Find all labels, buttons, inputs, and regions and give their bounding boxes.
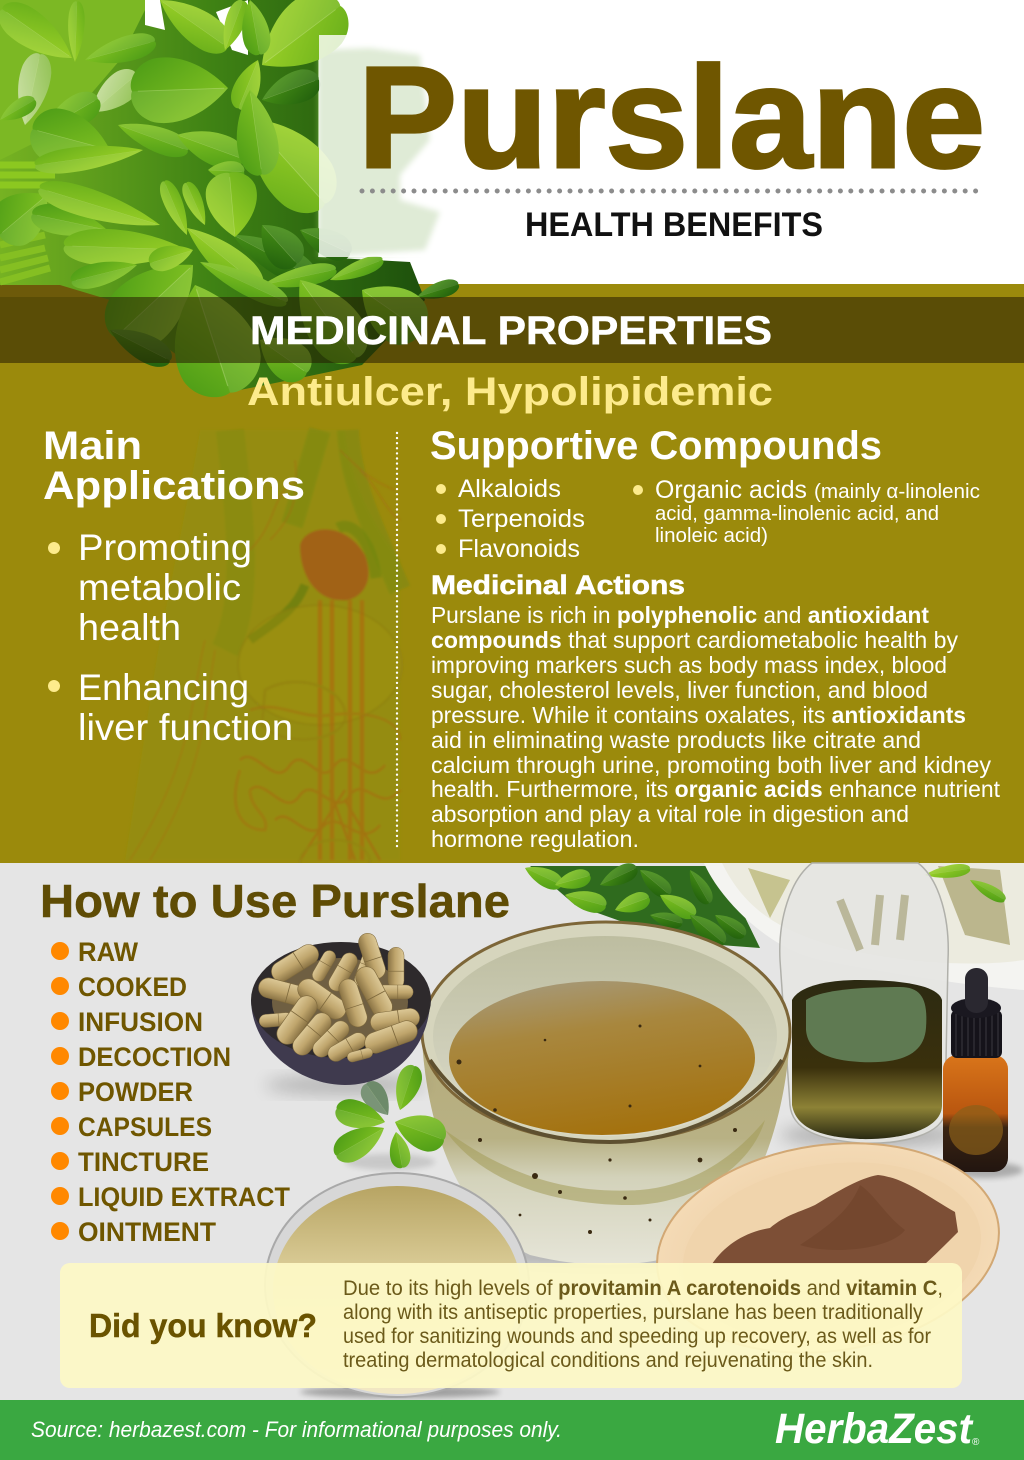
list: applications: Enhancing xyxy=(78,667,249,708)
list: forms of use: POWDER xyxy=(78,1077,193,1107)
photo: ceramic bowl of tea xyxy=(422,922,790,1269)
list: compounds: Terpenoids xyxy=(458,505,585,533)
list: compounds: Alkaloids xyxy=(458,475,561,503)
list: forms of use: DECOCTION xyxy=(78,1042,231,1072)
text: medicinal actions paragraph: sugar, cholesterol levels, liver function, and blood xyxy=(431,677,928,703)
subtitle: HEALTH BENEFITS xyxy=(525,206,823,244)
heading: main applications xyxy=(43,424,305,508)
list: applications: metabolic xyxy=(78,567,241,608)
title: Purslane xyxy=(358,37,985,198)
text: medicinal actions paragraph: pressure. While it contains oxalates, its antioxidants xyxy=(431,702,966,728)
callout text xyxy=(343,1277,943,1372)
list: forms of use xyxy=(51,937,290,1247)
top background leaves xyxy=(0,0,360,143)
list: compounds: acid, gamma-linolenic acid, and xyxy=(655,503,939,525)
list: compounds: linoleic acid) xyxy=(655,525,768,547)
subheading: antiulcer, hypolipidemic: Antiulcer, Hypolipidemic xyxy=(247,370,773,414)
dotted divider xyxy=(362,188,978,194)
text: medicinal actions paragraph: improving markers such as body mass index, blood xyxy=(431,652,947,678)
list: compounds: (mainly α-linolenic xyxy=(814,481,980,503)
list: forms of use: COOKED xyxy=(78,972,187,1002)
photo: dropper bottle xyxy=(943,968,1023,1178)
text: medicinal actions paragraph: hormone regulation. xyxy=(431,826,639,852)
panel: main applications xyxy=(43,424,305,748)
list: applications: liver function xyxy=(78,707,293,748)
heading: medicinal properties: MEDICINAL PROPERTIES xyxy=(250,309,772,353)
list: applications: Promoting xyxy=(78,527,252,568)
photo: glass bottle xyxy=(780,863,960,1147)
vertical dotted divider xyxy=(396,433,398,848)
photo: small green sprig xyxy=(329,1062,450,1170)
heading: main applications: Applications xyxy=(43,464,305,508)
photo: white plate xyxy=(704,862,1024,990)
list: forms of use: RAW xyxy=(78,937,138,967)
list: forms of use: OINTMENT xyxy=(78,1217,216,1247)
text: medicinal actions paragraph: compounds that support cardiometabolic health by xyxy=(431,627,958,653)
photo: purslane bunch xyxy=(0,0,461,407)
list: forms of use: CAPSULES xyxy=(78,1112,212,1142)
list: forms of use: INFUSION xyxy=(78,1007,203,1037)
callout text: along with its antiseptic properties, purslane has been traditionally xyxy=(343,1301,923,1324)
callout text: used for sanitizing wounds and speeding up recovery, as well as for xyxy=(343,1325,931,1348)
callout heading: Did you know? xyxy=(89,1307,317,1344)
list: compounds xyxy=(436,475,980,563)
panel: medicinal properties background xyxy=(0,284,1024,863)
list: forms of use: LIQUID EXTRACT xyxy=(78,1182,290,1212)
callout text: Due to its high levels of provitamin A carotenoids and vitamin C, xyxy=(343,1277,943,1300)
text: medicinal actions paragraph: calcium through urine, promoting both liver and kidney xyxy=(431,752,991,778)
logo: HerbaZest: HerbaZest xyxy=(775,1405,974,1453)
callout: did you know xyxy=(60,1263,962,1388)
heading: supportive compounds: Supportive Compounds xyxy=(430,424,882,468)
photo: herb sprigs xyxy=(521,860,760,951)
panel: supportive compounds xyxy=(430,424,1001,852)
band: medicinal properties xyxy=(0,297,1024,363)
text: medicinal actions paragraph: Purslane is rich in polyphenolic and antioxidant xyxy=(431,602,929,628)
faded leaves base xyxy=(318,48,440,257)
heading: how to use purslane: How to Use Purslane xyxy=(40,875,510,927)
panel: how to use background xyxy=(0,863,1024,1400)
callout text: treating dermatological conditions and rejuvenating the skin. xyxy=(343,1349,873,1372)
photo: capsules in dark bowl xyxy=(251,931,431,1095)
photo: wooden plate of powder xyxy=(643,1122,1013,1374)
photo: ointment tin xyxy=(265,1173,529,1398)
text: medicinal actions paragraph: absorption and play a vital role in digestion and xyxy=(431,801,909,827)
list: compounds: Organic acids xyxy=(655,476,807,504)
text: medicinal actions paragraph xyxy=(431,602,1001,852)
list: forms of use: TINCTURE xyxy=(78,1147,209,1177)
list: applications: health xyxy=(78,607,181,648)
main foreground leaves xyxy=(0,55,461,407)
list: applications xyxy=(48,527,293,748)
logo: HerbaZest: ® xyxy=(972,1437,980,1448)
source line: Source: herbazest.com - For informational purposes only. xyxy=(31,1417,562,1442)
footer xyxy=(0,1400,1024,1460)
shadow above band xyxy=(0,284,120,297)
translucent title backdrop over leaves xyxy=(319,35,1024,257)
illustration: human circulatory system xyxy=(125,430,402,884)
text: medicinal actions paragraph: health. Furthermore, its organic acids enhance nutrient xyxy=(431,776,1001,802)
stems xyxy=(0,165,60,282)
text: medicinal actions paragraph: aid in eliminating waste products like citrate and xyxy=(431,727,921,753)
heading: main applications: Main xyxy=(43,424,142,468)
heading: medicinal actions: Medicinal Actions xyxy=(431,570,685,600)
list: compounds: Flavonoids xyxy=(458,535,580,563)
